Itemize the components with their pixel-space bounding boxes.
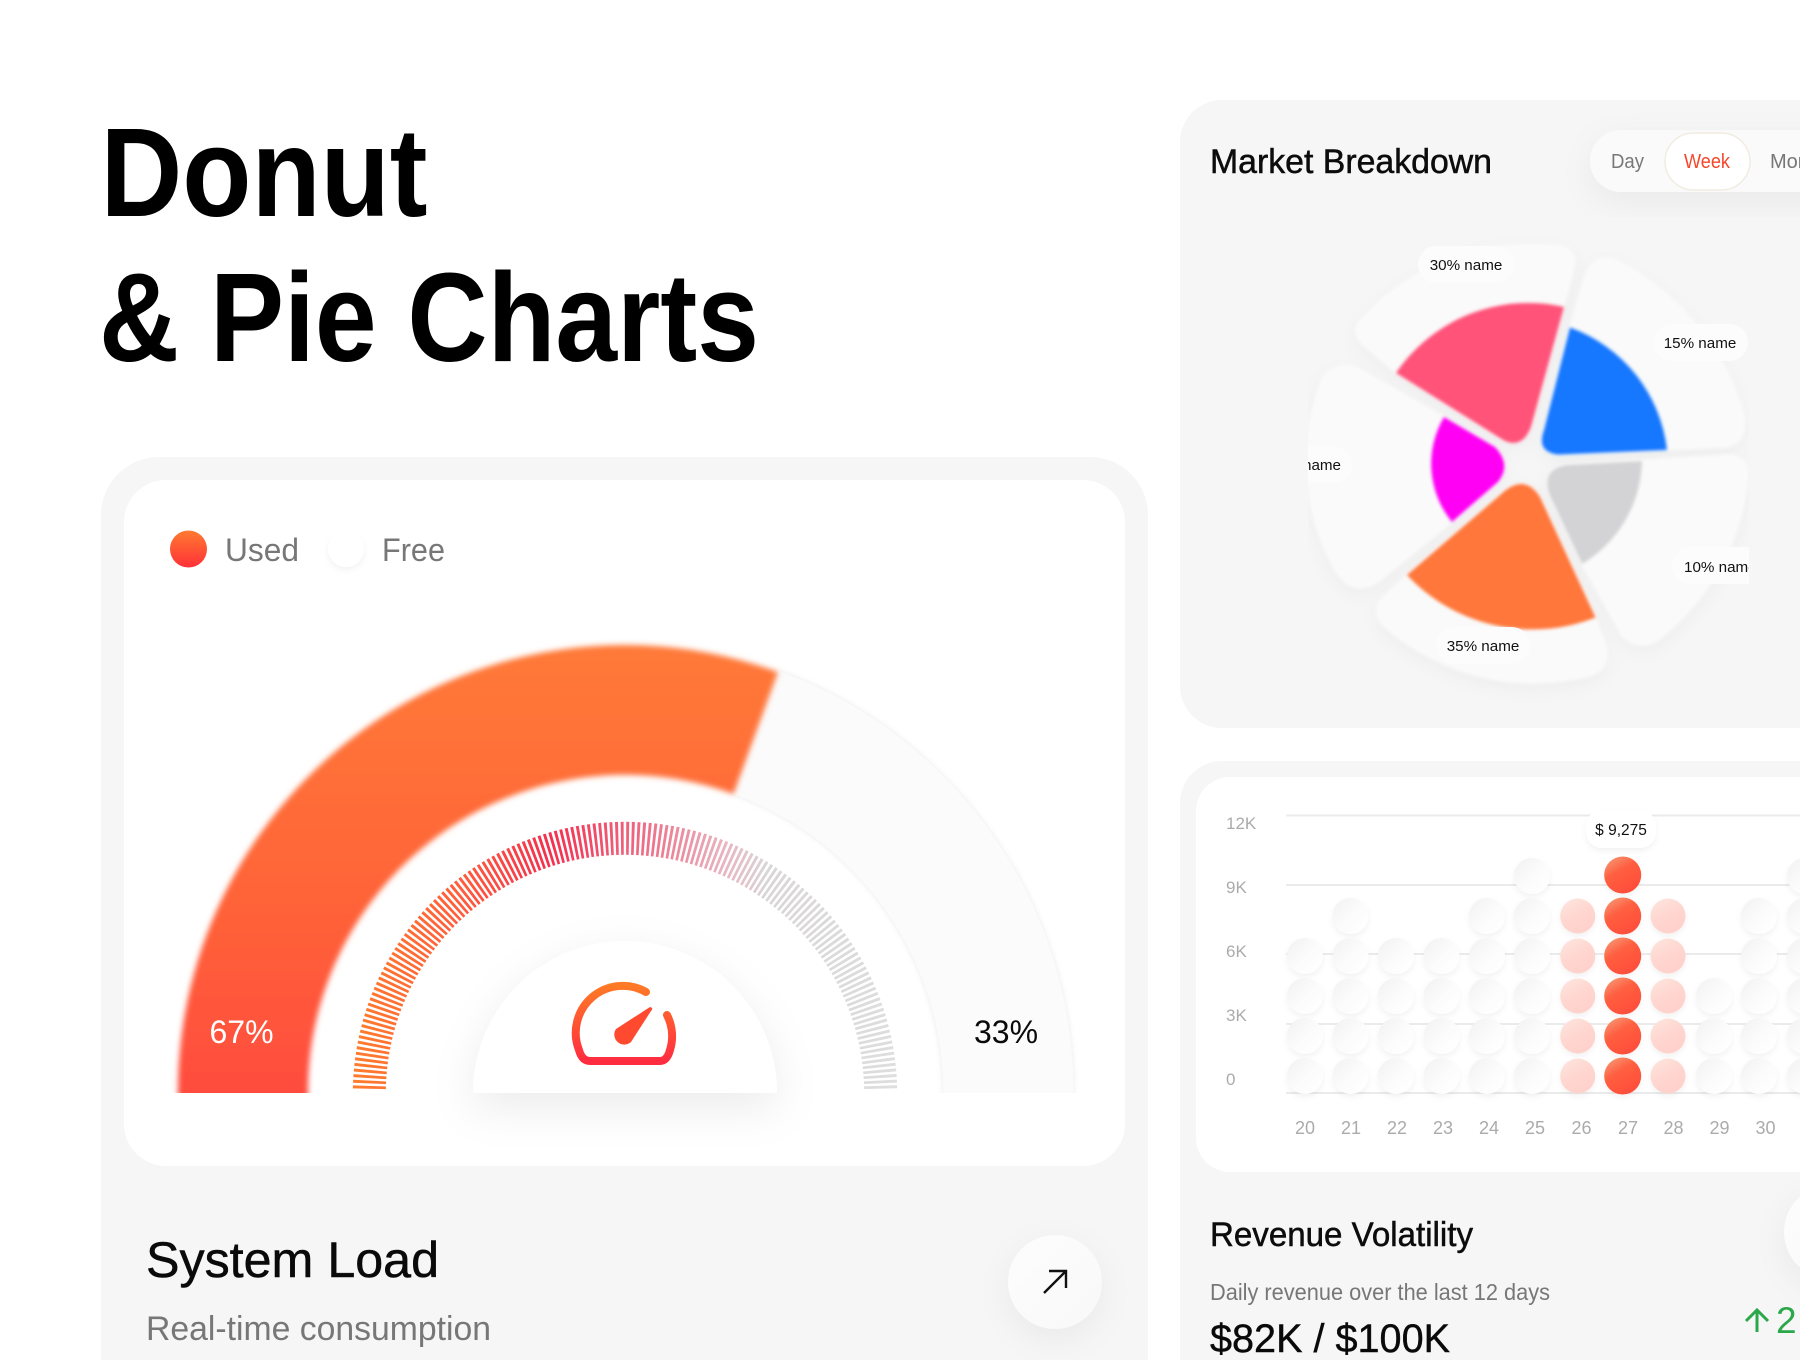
x axis: 28 xyxy=(1663,1118,1684,1138)
slice: 10% grey xyxy=(1547,461,1642,564)
legend: Free xyxy=(382,532,445,568)
tabs: Week xyxy=(1684,151,1731,173)
y axis xyxy=(1226,814,1257,1089)
gauge: centre hub xyxy=(473,941,777,1093)
tabs xyxy=(1590,130,1800,192)
panel: revenue volatility xyxy=(1180,761,1800,1360)
label: 10% name xyxy=(1685,547,1749,584)
y axis: 9K xyxy=(1226,878,1247,897)
arrow button xyxy=(1784,1185,1800,1279)
x axis: 20 xyxy=(1295,1118,1315,1138)
label: 30% name: 30% name xyxy=(1430,257,1502,274)
label: 35% name: 35% name xyxy=(1447,638,1519,655)
tooltip xyxy=(1586,810,1656,848)
heading: revenue volatility: Revenue Volatility xyxy=(1210,1216,1473,1254)
label: 10% name: 10% name xyxy=(1684,559,1757,576)
slice: 30% pink xyxy=(1396,303,1564,443)
label: name xyxy=(1308,462,1340,470)
y axis: 6K xyxy=(1226,942,1247,961)
icon: speedometer xyxy=(576,986,672,1061)
gauge: free arc xyxy=(733,671,1073,1110)
x axis: 21 xyxy=(1341,1118,1361,1138)
legend xyxy=(170,530,445,568)
panel: system load xyxy=(101,457,1148,1360)
y axis: 12K xyxy=(1226,814,1257,833)
dots: neighbouring days pink xyxy=(1560,898,1686,1094)
icon: arrow button xyxy=(1008,1235,1102,1329)
x axis xyxy=(1295,1118,1776,1138)
x axis: 26 xyxy=(1571,1118,1592,1138)
legend: Used xyxy=(225,532,299,568)
slice: 15% blue xyxy=(1542,328,1667,455)
gauge: used arc xyxy=(178,645,778,1110)
title: Donut xyxy=(100,102,428,243)
heading: system load: System Load xyxy=(146,1232,439,1288)
label: 30% name xyxy=(1430,260,1502,270)
label: name: 10% name xyxy=(1268,457,1341,474)
title: & Pie Charts xyxy=(99,247,759,388)
tooltip: $ 9,275 xyxy=(1595,822,1647,839)
grid lines xyxy=(1286,814,1800,1094)
slice: 35% orange xyxy=(1407,484,1596,629)
title xyxy=(99,102,759,388)
x axis: 22 xyxy=(1387,1118,1407,1138)
gauge: tick ring xyxy=(369,838,881,1094)
slice backing plates xyxy=(1306,244,1748,683)
y axis: 3K xyxy=(1226,1006,1247,1025)
dots: highlighted day red xyxy=(1604,856,1641,1094)
x axis: 29 xyxy=(1709,1118,1730,1138)
y axis: 0 xyxy=(1226,1070,1235,1089)
dot chart card xyxy=(1196,777,1800,1172)
label: 15% name: 15% name xyxy=(1664,335,1736,352)
slice: 10% magenta xyxy=(1431,417,1504,522)
tabs: Day xyxy=(1611,151,1644,173)
subheading: Real-time consumption xyxy=(146,1310,491,1348)
subheading: Daily revenue over the last 12 days xyxy=(1210,1279,1550,1305)
panel: market breakdown xyxy=(1180,100,1800,728)
heading: market breakdown: Market Breakdown xyxy=(1210,143,1492,181)
x axis: 24 xyxy=(1479,1118,1499,1138)
gauge card xyxy=(124,480,1125,1166)
x axis: 27 xyxy=(1618,1118,1638,1138)
dots: neutral days xyxy=(1287,858,1800,1094)
label: 35% name xyxy=(1447,627,1524,651)
label: 33%: 33% xyxy=(974,1014,1038,1050)
pie chart xyxy=(1308,260,1749,651)
trend xyxy=(1746,1300,1800,1341)
x axis: 23 xyxy=(1433,1118,1453,1138)
label: 67%: 67% xyxy=(209,1014,274,1050)
x axis: 25 xyxy=(1525,1118,1545,1138)
x axis: 30 xyxy=(1755,1118,1776,1138)
value: $82K / $100K xyxy=(1210,1317,1450,1360)
label: 15% name xyxy=(1664,338,1736,361)
